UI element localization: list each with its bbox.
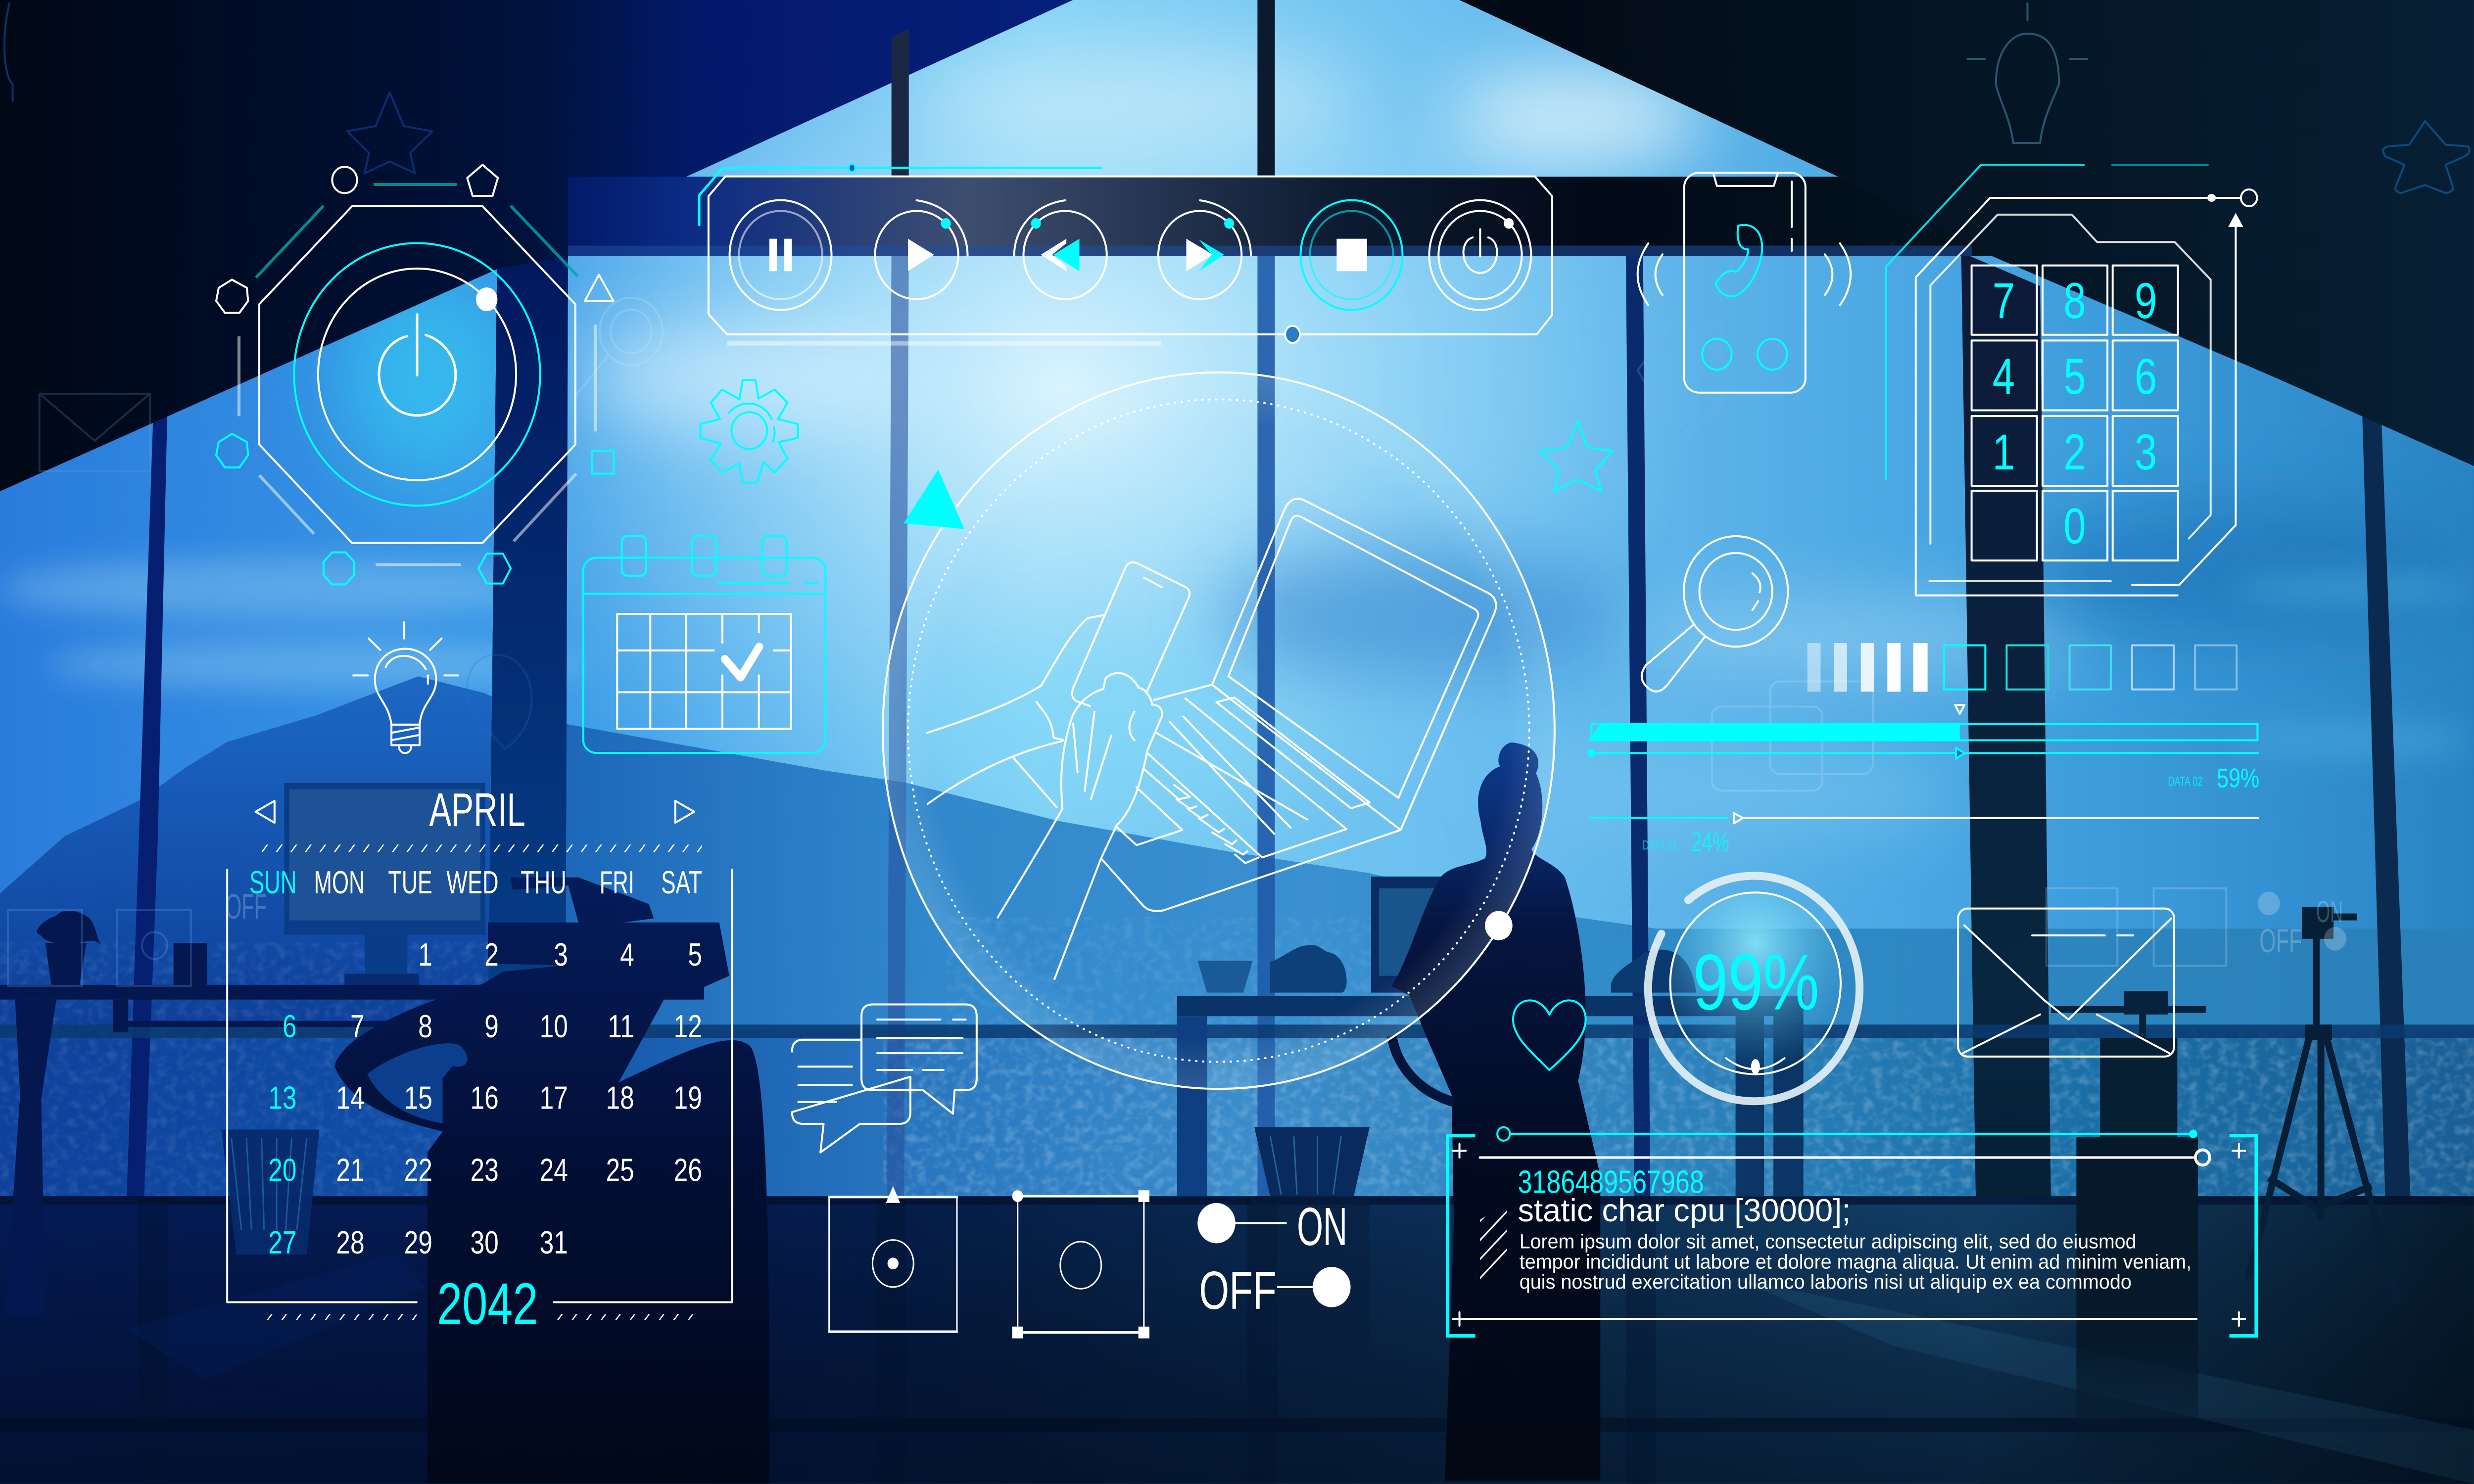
gauge value: 99% [1693,938,1819,1026]
octagon frame [259,206,575,543]
data labels: DATA 02 [2168,774,2202,789]
on switch [1197,1197,1347,1257]
media player control panel [699,164,1552,346]
faint ghost reflections of icons: OFF [226,886,267,926]
button: rewind [1014,200,1107,299]
on and off toggle switches [1197,1197,1351,1321]
day numbers: 27 [268,1225,297,1260]
left dial panel with power button [216,165,825,753]
speech bubbles icon [792,1004,977,1153]
faint ghost reflections of icons [8,298,2346,986]
gauge dot [1751,1059,1760,1074]
keypad digits [1993,272,2157,555]
progress meters [1588,643,2259,857]
weekday labels: SUN [249,865,296,900]
weekday labels: SAT [661,865,702,900]
data labels: 59% [2217,763,2259,793]
panel frame [709,177,1552,334]
keypad digits: 2 [2063,423,2086,480]
central circle with laptop and phone line drawing [883,372,1555,1089]
day numbers: 24 [540,1153,568,1188]
hatch block [1480,1203,1507,1289]
month header [256,783,694,836]
empty level squares [1944,646,2236,690]
selection widget with corner handles [1012,1190,1149,1339]
outer cyan ring [294,243,540,506]
button: power [1429,200,1531,310]
data labels: DATA 01 [1642,837,1677,853]
day numbers: 14 [336,1080,365,1116]
phone call icon [1638,173,1851,393]
code text: Lorem ipsum dolor sit amet, consectetur adipiscing elit, sed do eiusmod [1520,1231,2137,1253]
second data line [1590,813,2258,823]
silhouettes: centre desk and objects [1177,877,1804,1347]
day numbers: 4 [620,937,634,973]
day numbers: 29 [404,1225,432,1260]
cyan brackets [1448,1136,2256,1336]
day numbers: 3 [554,937,568,973]
gauge fill [1670,892,1841,1074]
laptop [1101,499,1496,911]
day numbers: 25 [606,1153,634,1188]
weekday labels: WED [446,865,499,900]
keypad digits: 1 [1993,423,2015,480]
progress bar at 59 percent [1588,705,2258,759]
keypad digits: 7 [1993,272,2015,329]
day numbers: 30 [470,1225,499,1260]
code text: static char cpu [30000]; [1518,1193,1851,1229]
day numbers: 6 [283,1009,297,1044]
cyan triangle [904,469,964,529]
icon: light bulb [353,622,458,753]
button: pause [730,200,831,310]
silhouettes: left desk, monitor, plant, camera and chair [0,783,769,1484]
target widget with triangle marker [829,1186,957,1332]
phone [1072,562,1189,706]
gauge rings [1648,876,1859,1101]
button: fast forward [1158,200,1251,299]
day numbers: 20 [268,1153,297,1188]
day numbers: 9 [484,1009,499,1044]
day numbers: 15 [404,1080,432,1116]
off switch [1199,1261,1351,1321]
floor [0,1196,2474,1484]
weekday labels: MON [314,865,365,900]
silhouette: seated woman [1392,742,1600,1481]
keypad frame lines [1886,165,2257,596]
dotted ring [908,399,1529,1062]
button: stop [1301,200,1402,310]
top and bottom rules [1468,1127,2210,1319]
keypad digits: 6 [2135,348,2157,405]
white level bars [1808,643,1928,692]
off switch: OFF [1199,1261,1277,1321]
on switch: ON [1297,1197,1347,1257]
weekday labels [249,865,702,900]
code text [1518,1164,2191,1294]
day numbers: 23 [470,1153,499,1188]
day numbers: 18 [606,1080,634,1116]
keypad digits: 9 [2135,272,2157,329]
day numbers: 5 [688,937,702,973]
day numbers: 10 [540,1009,568,1044]
faint ghost reflections of icons: OFF [2259,922,2302,959]
calendar panel [227,783,732,1337]
keypad panel [1886,165,2257,596]
code terminal panel [1448,1127,2256,1336]
code text: quis nostrud exercitation ullamco laboris nisi ut aliquip ex ea commodo [1520,1271,2132,1294]
year: 2042 [437,1271,538,1337]
hands [927,615,1162,979]
keypad digits: 4 [1993,348,2015,405]
day numbers: 22 [404,1153,432,1188]
inner white ring [318,269,516,480]
day numbers: 19 [674,1080,702,1116]
day numbers [268,937,702,1260]
icon: cyan gear [701,380,798,483]
data labels: 24% [1691,827,1729,857]
icon: magnifying glass [1642,536,1788,692]
small outlined shapes around the dial [216,165,614,584]
keypad digits: 0 [2063,498,2086,555]
cyan accent line [699,168,1101,225]
cyan heart icon [1513,1000,1586,1070]
day numbers: 21 [336,1153,365,1188]
glow disc [883,372,1555,1089]
plus marks [1453,1144,2245,1326]
keypad digits: 3 [2135,423,2157,480]
keypad digits: 8 [2063,272,2086,329]
code text: 3186489567968 [1518,1164,1704,1200]
day numbers: 1 [418,937,432,973]
gauge showing 99 percent [1648,876,1859,1101]
data labels [1642,763,2259,857]
weekday labels: TUE [388,865,432,900]
day numbers: 17 [540,1080,568,1116]
day numbers: 7 [350,1009,365,1044]
day numbers: 8 [418,1009,432,1044]
weekday labels: THU [521,865,567,900]
day numbers: 26 [674,1153,702,1188]
outer ring [883,372,1555,1089]
day numbers: 16 [470,1080,499,1116]
icon: power symbol [379,315,456,416]
calendar frame [227,870,732,1302]
day numbers: 2 [484,937,499,973]
slider [727,164,1300,346]
month header: APRIL [429,783,525,836]
dark ghost icons on the roof [4,3,2470,193]
day numbers: 11 [608,1009,634,1044]
keypad digits: 5 [2063,348,2086,405]
button: play [875,200,967,299]
code text: tempor incididunt ut labore et dolore magna aliqua. Ut enim ad minim veniam, [1520,1251,2191,1273]
day numbers: 12 [674,1009,702,1044]
faint ghost reflections of icons: ON [2316,894,2343,928]
day numbers: 13 [268,1080,297,1116]
icon: calendar with check mark [583,536,825,753]
day numbers: 28 [336,1225,365,1260]
icon: envelope [1958,909,2174,1057]
cyan star icon [1540,420,1613,491]
day numbers: 31 [540,1225,568,1260]
ring handle dot [1485,911,1513,940]
weekday labels: FRI [600,865,634,900]
dial handle dot [476,287,497,311]
silhouettes: speakers and tripod on the right [2051,907,2398,1474]
